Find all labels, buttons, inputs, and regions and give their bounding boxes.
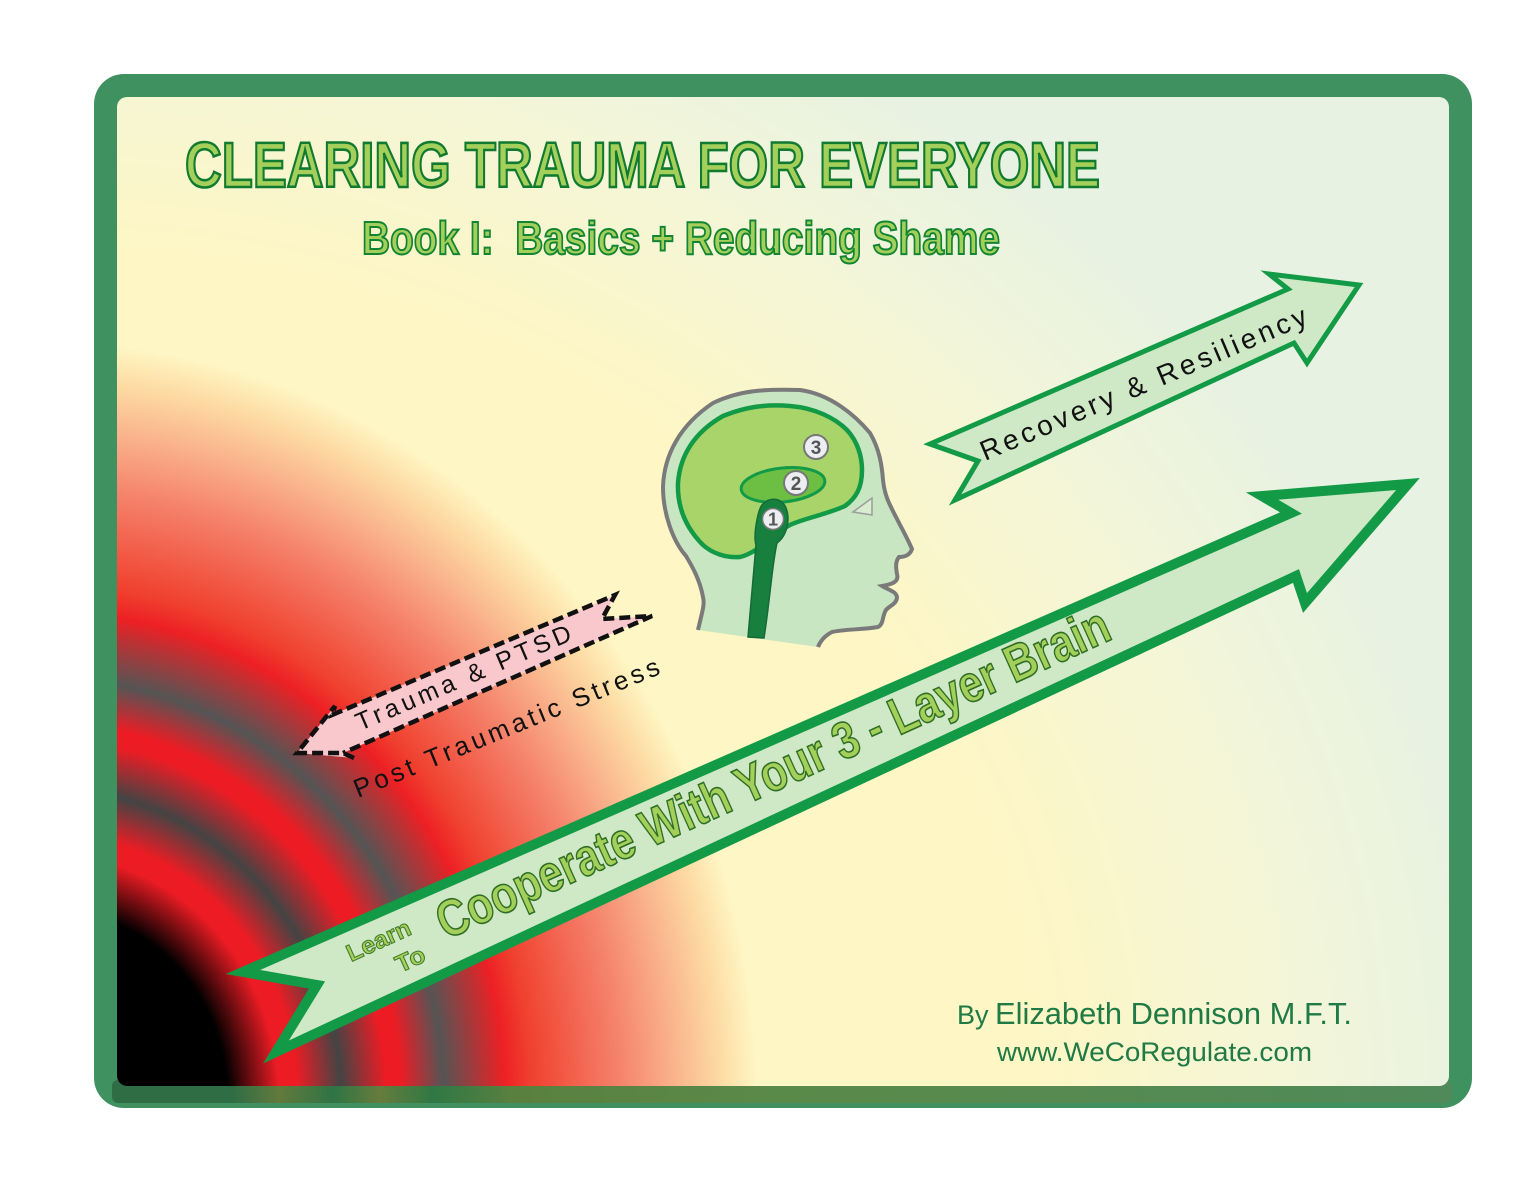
arrow label: Trauma & PTSD	[351, 619, 576, 737]
arrow: cooperate with your 3-layer brain	[243, 484, 1408, 1052]
marker 3: 3	[811, 438, 821, 459]
author credit: Elizabeth Dennison M.F.T.	[995, 996, 1352, 1031]
brain cortex layer 3	[678, 405, 862, 557]
arrow: trauma and PTSD	[297, 595, 652, 758]
marker 3	[804, 435, 828, 459]
brainstem layer 1	[748, 499, 788, 638]
head silhouette	[663, 390, 912, 647]
website: www.WeCoRegulate.com	[996, 1037, 1312, 1067]
frame inner bottom band	[112, 1080, 1452, 1103]
title: CLEARING TRAUMA FOR EVERYONE	[185, 129, 1100, 201]
arrow: recovery and resiliency	[930, 274, 1359, 500]
learn to label	[342, 915, 430, 978]
caption: post traumatic stress: Post Traumatic Stress	[349, 651, 664, 804]
learn to label: To	[391, 941, 430, 978]
subtitle: Book I: Basics + Reducing Shame	[362, 212, 1000, 264]
learn to label: Learn	[342, 915, 415, 967]
marker 1	[762, 508, 784, 530]
author credit: By	[957, 1000, 989, 1030]
arrow main label: Cooperate With Your 3 - Layer Brain	[427, 596, 1119, 951]
limbic layer 2	[739, 464, 827, 506]
arrow label: Recovery & Resiliency	[975, 300, 1311, 467]
marker 2	[784, 471, 808, 495]
marker 2: 2	[791, 474, 801, 495]
background panel with radial trauma rings	[117, 97, 1449, 1086]
outer green frame	[94, 74, 1472, 1108]
marker 1: 1	[768, 510, 778, 530]
icon: head with three-layer brain	[663, 390, 912, 647]
eye triangle	[853, 498, 872, 515]
